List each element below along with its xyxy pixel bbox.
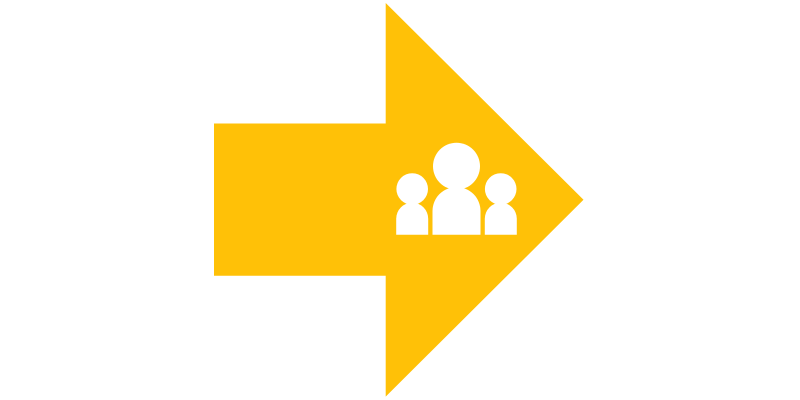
icon: left person — [396, 173, 428, 235]
arrow — [214, 3, 584, 397]
icon: group of people — [396, 143, 517, 235]
icon: center person — [432, 143, 480, 235]
icon: right person — [485, 173, 517, 235]
